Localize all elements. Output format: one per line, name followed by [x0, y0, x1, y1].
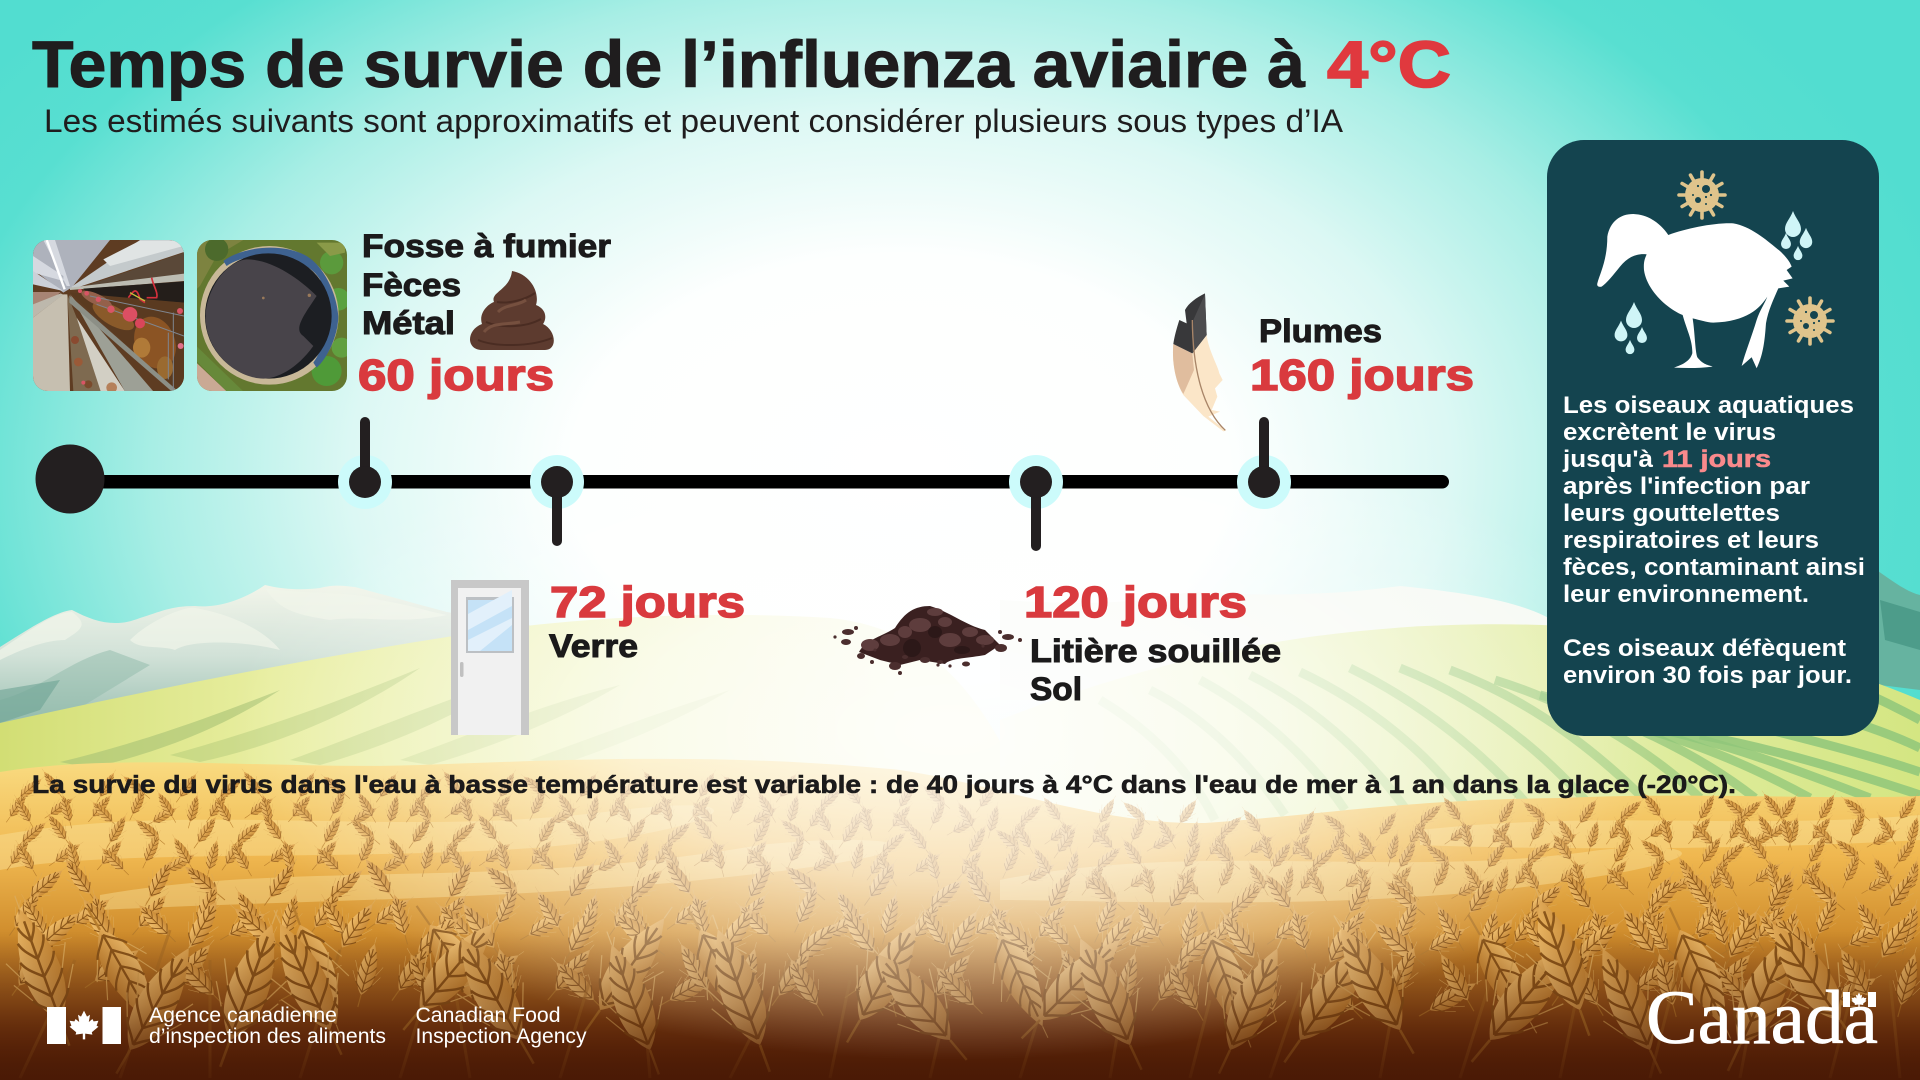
agency name: French — [149, 1004, 386, 1048]
logo: Canada wordmark: Canada — [1646, 976, 1878, 1060]
panel text: Les oiseaux aquatiques — [1563, 392, 1854, 419]
wheat ears, middle rows — [0, 849, 1920, 1029]
panel text: 11 jours — [1662, 446, 1771, 473]
agency name: English: Canadian Food — [416, 1004, 560, 1027]
icon: virus particle — [1679, 172, 1725, 218]
logo: CFIA flag symbol — [47, 1007, 121, 1044]
wheat ears, large foreground — [0, 875, 1881, 1080]
agency name: English: Inspection Agency — [416, 1025, 587, 1048]
icon: feather — [1173, 293, 1226, 431]
agency name: French: d’inspection des aliments — [149, 1025, 386, 1048]
icon: water droplets — [1615, 302, 1647, 354]
agency name: English — [416, 1004, 587, 1048]
labels: Litière souillée, Sol: Sol — [1030, 671, 1082, 707]
wheat ears, small rows — [0, 764, 1920, 906]
panel: waterfowl — [1547, 140, 1879, 736]
panel text: environ 30 fois par jour. — [1563, 662, 1852, 689]
marker: 120 days — [1009, 455, 1063, 551]
labels: Litière souillée, Sol — [1030, 633, 1281, 707]
panel text: leur environnement. — [1563, 581, 1809, 608]
icon: soil pile — [833, 606, 1022, 675]
title: Temps de survie de l’influenza aviaire à — [32, 27, 1305, 101]
label: Verre: Verre — [549, 628, 638, 664]
label: Fosse à fumier, Fèces, Métal: Fosse à fumier — [362, 228, 611, 264]
value: 60 jours: 60 jours — [358, 351, 554, 400]
agency name: French: Agence canadienne — [149, 1004, 337, 1027]
panel text: excrètent le virus — [1563, 419, 1776, 446]
panel text — [1562, 392, 1865, 689]
water survival note: La survie du virus dans l'eau à basse température est variable : de 40 jours à 4°C dans l'eau de mer à 1 an dans la glace (-20°C). — [32, 771, 1736, 799]
label: Fosse à fumier, Fèces, Métal: Métal — [362, 305, 455, 341]
icon: water droplets — [1781, 211, 1812, 260]
icon: feces — [470, 271, 554, 350]
icon: duck — [1597, 214, 1793, 368]
panel text: respiratoires et leurs — [1563, 527, 1819, 554]
marker: 60 days — [338, 417, 392, 509]
wheat stems — [20, 930, 1900, 1078]
label: Plumes: Plumes — [1259, 313, 1382, 349]
value: 160 jours: 160 jours — [1250, 351, 1474, 400]
subtitle: Les estimés suivants sont approximatifs et peuvent considérer plusieurs sous types d’IA — [44, 103, 1344, 139]
panel text: fèces, contaminant ainsi — [1563, 554, 1865, 581]
timeline — [36, 417, 1449, 551]
marker: 72 days — [530, 455, 584, 546]
start marker — [36, 444, 104, 514]
panel text: leurs gouttelettes — [1563, 500, 1780, 527]
photo: poultry barn — [33, 240, 184, 393]
value: 72 jours: 72 jours — [550, 578, 745, 627]
title: 4°C — [1327, 27, 1451, 101]
photo: manure pit — [196, 238, 352, 391]
marker: 160 days — [1237, 417, 1291, 509]
label: Fosse à fumier, Fèces, Métal: Fèces — [362, 267, 461, 303]
icon: glass door — [451, 580, 529, 735]
panel text: jusqu'à — [1562, 446, 1654, 473]
value: 120 jours: 120 jours — [1024, 578, 1247, 627]
label: Fosse à fumier, Fèces, Métal — [362, 228, 611, 341]
panel text: après l'infection par — [1563, 473, 1810, 500]
icon: virus particle — [1787, 298, 1833, 344]
panel text: Ces oiseaux défèquent — [1563, 635, 1846, 662]
labels: Litière souillée, Sol: Litière souillée — [1030, 633, 1281, 669]
